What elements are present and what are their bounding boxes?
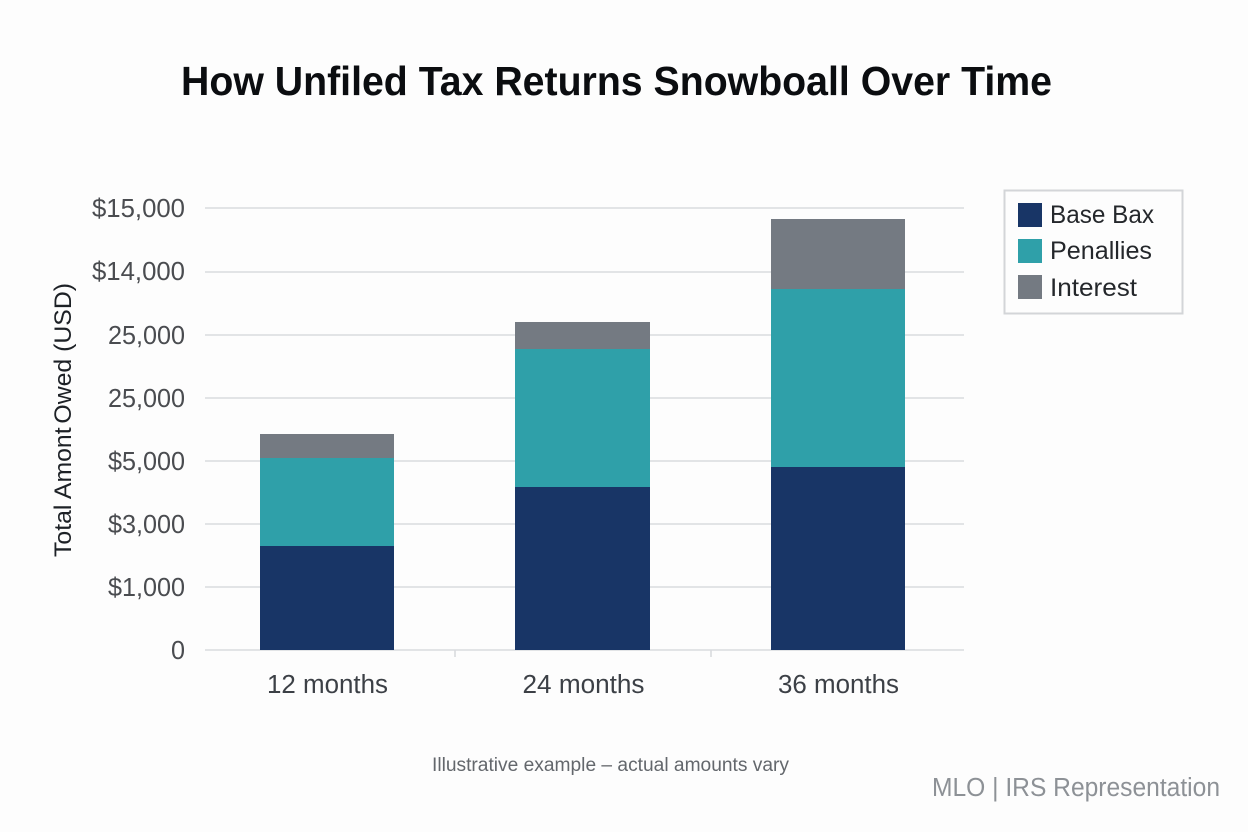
y axis labels: 25,000 — [108, 322, 185, 350]
y axis labels: $3,000 — [108, 511, 185, 539]
footnote: Illustrative example – actual amounts vary — [432, 755, 789, 776]
y axis labels: $14,000 — [92, 258, 185, 286]
brand label: MLO | IRS Representation — [932, 774, 1220, 802]
legend: Penallies — [1050, 237, 1152, 265]
title: How Unfiled Tax Returns Snowboall Over Time — [181, 58, 1052, 104]
y axis labels: $1,000 — [108, 574, 185, 602]
bar: 24 months — [515, 322, 650, 650]
x axis labels: 36 months — [778, 671, 899, 699]
x axis labels: 24 months — [522, 671, 644, 699]
legend — [1004, 190, 1182, 314]
x axis labels: 12 months — [267, 671, 388, 699]
legend: Interest — [1050, 274, 1137, 302]
x axis labels — [267, 671, 899, 699]
y axis labels: 25,000 — [108, 385, 185, 413]
gridlines — [205, 208, 964, 657]
bar: 12 months — [260, 434, 394, 650]
legend: Base Bax — [1050, 201, 1154, 229]
y axis labels: $15,000 — [92, 195, 185, 223]
y axis title: Total Amont Owed (USD) — [50, 283, 77, 557]
y axis labels — [92, 195, 185, 665]
y axis labels: $5,000 — [108, 448, 185, 476]
y axis labels: 0 — [171, 637, 185, 665]
bar: 36 months — [771, 219, 905, 650]
